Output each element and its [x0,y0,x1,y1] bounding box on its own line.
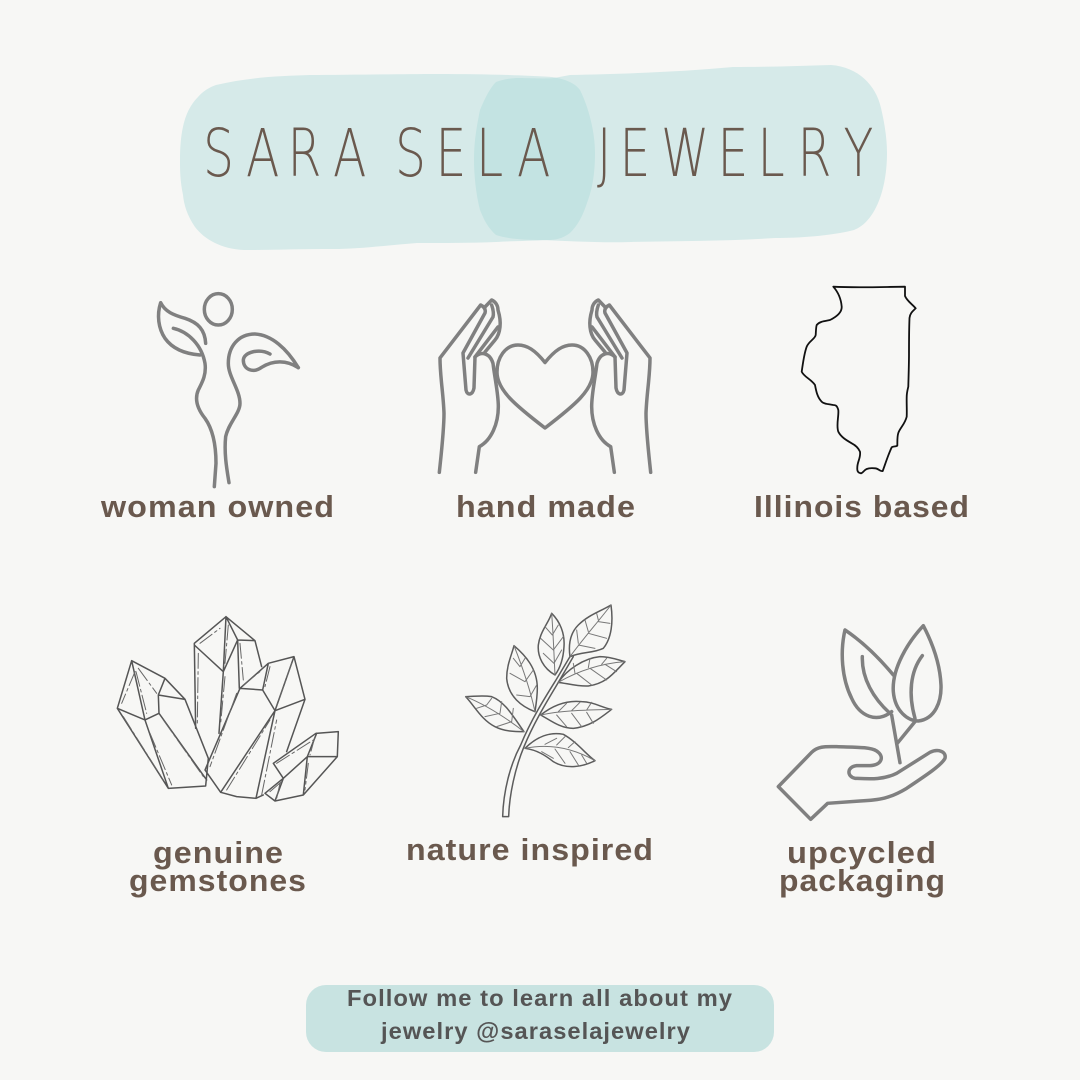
brush blob: right [474,65,887,242]
label: Illinois based [754,489,970,524]
label: packaging [779,863,946,898]
label: nature inspired [406,832,654,867]
label: woman owned [100,489,335,524]
icon: hand holding seedling [778,626,945,819]
brush blob: overlap [474,78,595,240]
label: upcycled [787,835,937,870]
icon: Illinois outline [802,287,916,473]
label: gemstones [129,863,307,898]
panel: genuine gemstones [117,617,338,898]
callout background [306,985,774,1052]
brush blob: left [180,74,595,250]
callout text line 1: Follow me to learn all about my [347,985,733,1011]
heart [497,345,593,428]
header banner with title [180,65,887,250]
right hand [590,300,651,472]
icon: leafy branch [466,605,625,817]
icon: woman with leaves [159,294,298,487]
panel: upcycled packaging [778,626,946,898]
icon: hands holding heart [439,300,651,472]
callout: follow [306,985,774,1052]
title: SARA SELA JEWELRY [203,115,873,192]
callout text line 2: jewelry @saraselajewelry [380,1018,691,1044]
panel: hand made [439,300,651,524]
icon: crystals [117,617,338,801]
label: genuine [153,835,284,870]
label: hand made [456,489,636,524]
left hand [439,300,500,472]
panel: Illinois based [754,287,970,524]
panel: woman owned [100,294,335,524]
panel: nature inspired [406,605,654,867]
